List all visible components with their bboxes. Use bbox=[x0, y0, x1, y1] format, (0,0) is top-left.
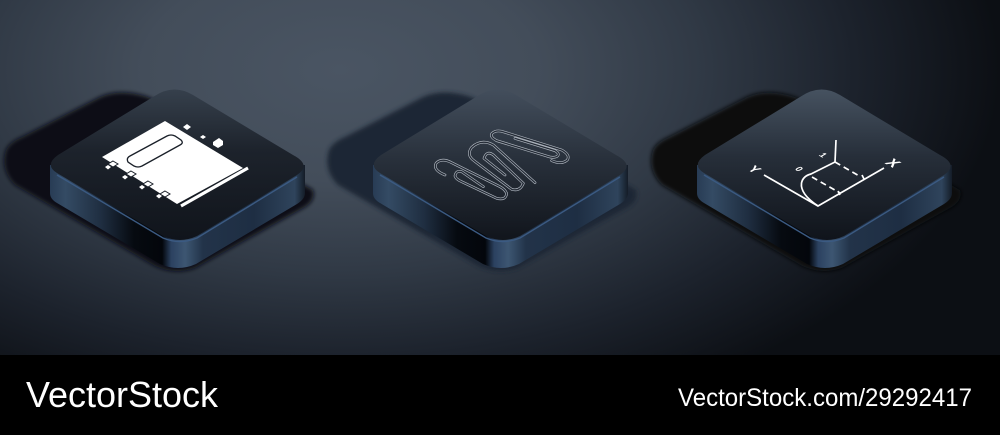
icon: graph bbox=[744, 140, 904, 206]
edge highlight bbox=[380, 175, 620, 242]
side wall bbox=[697, 165, 952, 268]
icon: paper clips bbox=[435, 131, 568, 199]
shadow bbox=[327, 92, 637, 271]
edge highlight bbox=[57, 175, 297, 242]
icon: graph: 1 bbox=[816, 151, 830, 159]
shadow bbox=[651, 92, 961, 271]
shadow bbox=[4, 92, 314, 271]
button: graph bbox=[651, 89, 961, 271]
icon: graph: X bbox=[881, 157, 904, 170]
footer logo: VectorStock bbox=[26, 374, 219, 415]
side wall bbox=[50, 165, 305, 268]
footer image id: VectorStock.com/29292417 bbox=[678, 384, 972, 412]
top face bbox=[374, 89, 627, 240]
icon: notebook bbox=[102, 121, 248, 206]
edge highlight bbox=[704, 175, 944, 242]
footer bar bbox=[0, 355, 1000, 435]
top face bbox=[698, 89, 951, 240]
top face bbox=[51, 89, 304, 240]
icon: graph: Y bbox=[744, 163, 765, 175]
side wall bbox=[373, 165, 628, 268]
icon: graph: 0 bbox=[792, 165, 806, 173]
button: paper clips bbox=[327, 89, 637, 271]
button: notebook bbox=[4, 89, 314, 271]
